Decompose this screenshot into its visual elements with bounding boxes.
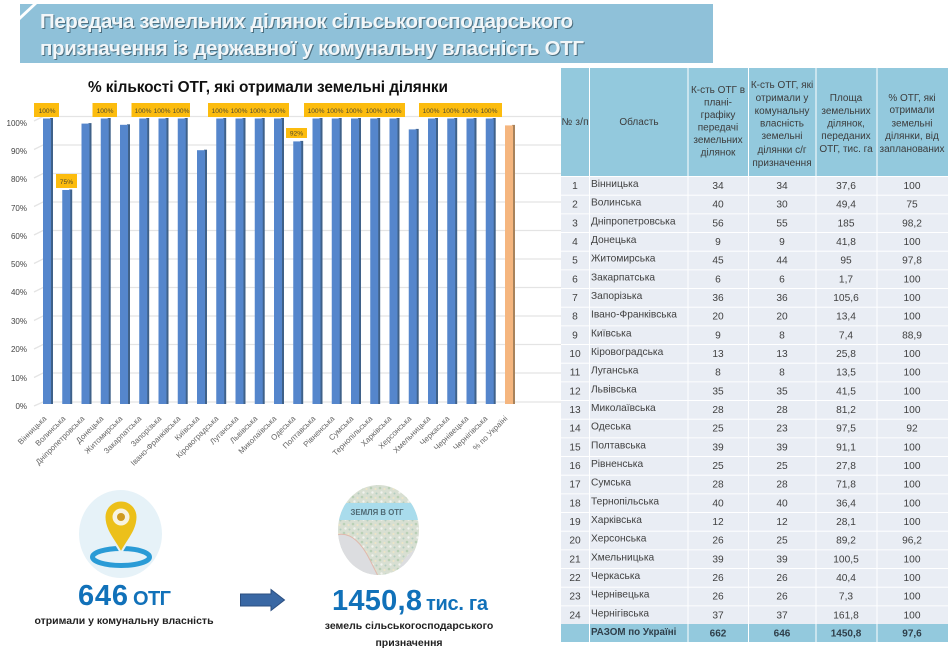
table header: графіку xyxy=(701,109,735,121)
category labels: Чернівецька xyxy=(432,414,471,452)
table rows: 27,8 xyxy=(836,461,856,472)
category labels: % по Україні xyxy=(471,414,510,452)
table header: ділянки с/г xyxy=(758,145,807,156)
title banner xyxy=(20,4,713,63)
icon: land map circle: ЗЕМЛЯ В ОТГ xyxy=(350,508,404,517)
table header: К-сть ОТГ, які xyxy=(751,80,813,91)
table rows: 36 xyxy=(776,293,788,304)
title banner: Передача земельних ділянок сільськогосподарського xyxy=(40,10,573,33)
table rows: 100 xyxy=(904,610,921,621)
chart title: % кількості ОТГ, які отримали земельні ділянки xyxy=(88,79,448,96)
table header: призначення xyxy=(752,158,812,169)
table rows: 25 xyxy=(776,536,788,547)
table rows: 5 xyxy=(572,256,578,267)
data labels: 100% xyxy=(154,108,171,115)
table rows: 37,6 xyxy=(836,181,856,192)
table rows: 44 xyxy=(776,256,788,267)
table rows: 26 xyxy=(776,592,788,603)
y axis labels: 90% xyxy=(11,147,27,156)
table rows: 96,2 xyxy=(902,536,922,547)
data labels: 100% xyxy=(327,108,344,115)
table rows: Дніпропетровська xyxy=(591,216,676,227)
table rows: 39 xyxy=(776,442,788,453)
table rows: 100 xyxy=(904,312,921,323)
table rows: 91,1 xyxy=(836,442,856,453)
y axis labels: 50% xyxy=(11,260,27,269)
stat: 1450,8 тис. га: тис. га xyxy=(426,593,489,615)
table rows: 12 xyxy=(776,517,788,528)
data labels: 100% xyxy=(366,108,383,115)
table rows: Рівненська xyxy=(591,459,643,470)
table rows: 11 xyxy=(570,368,581,379)
data labels: 100% xyxy=(346,108,363,115)
table rows: Івано-Франківська xyxy=(591,310,677,321)
y axis labels: 30% xyxy=(11,317,27,326)
category labels: Миколаївська xyxy=(237,414,279,456)
data labels: 100% xyxy=(97,108,114,115)
table rows: 21 xyxy=(569,554,581,565)
table rows: 100 xyxy=(904,442,921,453)
table rows: 28 xyxy=(776,480,788,491)
table rows: 6 xyxy=(572,274,578,285)
table rows: 25 xyxy=(712,424,724,435)
table total row: 646 xyxy=(774,628,791,640)
table rows: 41,5 xyxy=(836,386,856,397)
table total row: 1450,8 xyxy=(831,628,862,640)
bars xyxy=(43,118,515,404)
table rows: 37 xyxy=(712,610,724,621)
table rows: 100 xyxy=(904,554,921,565)
table rows: 24 xyxy=(569,610,581,621)
data labels: 100% xyxy=(385,108,402,115)
table rows: 100 xyxy=(904,480,921,491)
category labels: Івано-Франківська xyxy=(129,414,183,467)
table header: земельних xyxy=(693,135,743,146)
table rows: 95 xyxy=(840,256,852,267)
data labels: 100% xyxy=(481,108,498,115)
table rows: 23 xyxy=(776,424,788,435)
table rows: 2 xyxy=(572,200,578,211)
table rows: 36,4 xyxy=(836,498,856,509)
y axis labels: 80% xyxy=(11,175,27,184)
stat: 646 ОТГ: ОТГ xyxy=(133,588,171,610)
table rows: Київська xyxy=(591,328,632,339)
table rows: 39 xyxy=(712,554,724,565)
table header: % ОТГ, які xyxy=(888,93,936,104)
table rows: 100 xyxy=(904,573,921,584)
table rows: 1 xyxy=(572,181,578,192)
stat: 1450,8 тис. га xyxy=(332,585,489,617)
table rows: 25 xyxy=(712,461,724,472)
category labels: Полтавська xyxy=(281,414,318,451)
y axis labels: 10% xyxy=(11,374,27,383)
category labels: Луганська xyxy=(208,414,241,446)
category labels: Рівненська xyxy=(301,414,337,449)
data labels: 100% xyxy=(135,108,152,115)
table header: переданих xyxy=(821,131,871,142)
table rows: Донецька xyxy=(591,235,637,246)
table rows: 13,4 xyxy=(836,312,856,323)
table rows: 13 xyxy=(776,349,788,360)
data labels: 92% xyxy=(290,130,303,138)
table header: отримали xyxy=(890,105,934,116)
table rows: 88,9 xyxy=(902,330,922,341)
table rows: 100 xyxy=(904,293,921,304)
table rows: 41,8 xyxy=(836,237,856,248)
table header: № з/п xyxy=(562,117,588,128)
table rows: 15 xyxy=(569,442,581,453)
caption: 646: отримали у комунальну власність xyxy=(34,615,214,627)
y axis labels: 60% xyxy=(11,232,27,241)
table header: запланованих xyxy=(880,144,944,155)
table rows: 35 xyxy=(776,386,788,397)
table rows: 97,5 xyxy=(836,424,856,435)
table rows: 7,3 xyxy=(839,592,853,603)
table rows: 45 xyxy=(712,256,724,267)
y axis labels: 100% xyxy=(7,119,27,128)
table header: земельні xyxy=(892,118,932,130)
table rows: Хмельницька xyxy=(591,552,655,563)
data labels: 100% xyxy=(39,108,56,115)
table rows: Закарпатська xyxy=(591,272,655,283)
stat: 646 ОТГ: 646 xyxy=(78,580,128,612)
table rows: 100 xyxy=(904,517,921,528)
table rows: 89,2 xyxy=(836,536,856,547)
table rows: 30 xyxy=(776,200,788,211)
table rows: 26 xyxy=(712,573,724,584)
table rows: 105,6 xyxy=(833,293,859,304)
table rows: 7 xyxy=(572,293,578,304)
data labels: 100% xyxy=(462,108,479,115)
category labels: Сумська xyxy=(327,414,356,442)
table rows: 100 xyxy=(904,181,921,192)
table rows: 8 xyxy=(779,330,785,341)
category labels: Хмельницька xyxy=(391,414,433,455)
table rows: 100 xyxy=(904,349,921,360)
table header: плані- xyxy=(704,98,732,108)
table rows: 28 xyxy=(712,480,724,491)
table header: ділянок xyxy=(701,148,736,158)
category labels: Закарпатська xyxy=(102,414,144,456)
stat: 646 ОТГ xyxy=(78,580,171,612)
table rows: 40 xyxy=(776,498,788,509)
data labels: 100% xyxy=(212,108,229,115)
table rows: 100,5 xyxy=(833,554,859,565)
table header: передачі xyxy=(698,122,738,134)
table rows: Сумська xyxy=(591,478,631,489)
table rows: 55 xyxy=(776,218,788,229)
category labels: Одеська xyxy=(269,414,298,442)
data labels: 100% xyxy=(443,108,460,115)
table rows: 6 xyxy=(779,274,785,285)
table rows: 100 xyxy=(904,237,921,248)
table rows: 100 xyxy=(904,498,921,509)
title banner: призначення із державної у комунальну власність ОТГ xyxy=(41,38,585,61)
table rows: Кіровоградська xyxy=(591,347,664,358)
caption: 1450,8 xyxy=(325,620,493,649)
table rows: 9 xyxy=(572,330,578,341)
data table xyxy=(561,68,948,642)
table header: земельних xyxy=(821,106,871,117)
table rows: 25 xyxy=(776,461,788,472)
table rows: 9 xyxy=(779,237,785,248)
table header: Площа xyxy=(830,93,863,104)
table rows: Чернігівська xyxy=(591,608,649,619)
icon: land map circle xyxy=(338,485,419,575)
bar chart xyxy=(7,103,561,467)
y axis labels: 40% xyxy=(11,288,27,297)
table header: Область xyxy=(619,116,659,128)
caption: 1450,8: призначення xyxy=(375,637,443,649)
data labels: 100% xyxy=(231,108,248,115)
table rows: 71,8 xyxy=(836,480,856,491)
table rows: 40,4 xyxy=(836,573,856,584)
title banner: Передача земельних ділянок сільськогосподарського xyxy=(41,11,574,34)
table rows: 13 xyxy=(712,349,724,360)
table rows: 14 xyxy=(569,424,581,435)
table rows: 100 xyxy=(904,405,921,416)
category labels: Вінницька xyxy=(16,414,49,446)
table rows: 19 xyxy=(569,517,581,528)
table rows: 20 xyxy=(776,312,788,323)
table rows: 28 xyxy=(712,405,724,416)
table rows: Херсонська xyxy=(591,534,647,545)
category labels: Запорізька xyxy=(129,414,164,448)
data labels: 100% xyxy=(250,108,267,115)
table rows: 56 xyxy=(712,218,724,229)
table header: власність xyxy=(760,118,804,130)
table header: комунальну xyxy=(755,106,809,117)
table rows: 75 xyxy=(906,200,918,211)
caption: 1450,8: земель сільськогосподарського xyxy=(325,620,493,632)
table rows: Черкаська xyxy=(591,571,641,582)
table rows: Львівська xyxy=(591,384,637,395)
table header: отримали у xyxy=(756,93,808,104)
table rows: Луганська xyxy=(591,366,639,377)
table total row: 97,6 xyxy=(902,628,922,640)
table rows: 12 xyxy=(712,517,724,528)
table header: ОТГ, тис. га xyxy=(819,144,873,155)
table rows: Вінницька xyxy=(591,179,639,190)
table rows: 23 xyxy=(569,592,581,603)
table rows: Волинська xyxy=(591,198,642,209)
table rows: 4 xyxy=(572,237,578,248)
table rows: 49,4 xyxy=(836,200,856,211)
table rows: 40 xyxy=(712,498,724,509)
table rows: 100 xyxy=(904,274,921,285)
table rows: 26 xyxy=(712,536,724,547)
arrow xyxy=(240,590,284,610)
table rows: 28 xyxy=(776,405,788,416)
table rows: 161,8 xyxy=(833,610,859,621)
category labels: Чернігівська xyxy=(451,414,490,452)
table rows: 40 xyxy=(712,200,724,211)
table rows: 20 xyxy=(712,312,724,323)
table rows: 6 xyxy=(715,274,721,285)
table rows: 81,2 xyxy=(836,405,856,416)
table rows: 185 xyxy=(838,218,855,229)
table total row: 662 xyxy=(710,628,727,640)
category labels: Київська xyxy=(173,414,202,443)
table rows: 100 xyxy=(904,368,921,379)
table total row xyxy=(561,624,948,642)
data labels: 100% xyxy=(423,108,440,115)
table rows: Тернопільська xyxy=(591,496,659,507)
table rows: 39 xyxy=(776,554,788,565)
table rows: 26 xyxy=(776,573,788,584)
table rows: Чернівецька xyxy=(591,590,650,601)
table rows: Житомирська xyxy=(591,254,656,265)
table rows: 92 xyxy=(906,424,918,435)
table rows: 18 xyxy=(569,498,581,509)
table rows: Полтавська xyxy=(591,440,646,451)
table rows: 12 xyxy=(569,386,581,397)
table header: земельні xyxy=(762,131,802,142)
table rows: 8 xyxy=(572,312,578,323)
stat: 1450,8 тис. га: 1450,8 xyxy=(332,585,422,617)
table rows: 97,8 xyxy=(902,256,922,267)
category labels: Донецька xyxy=(74,414,106,445)
category labels: Кіровоградська xyxy=(174,414,221,460)
table rows: 1,7 xyxy=(839,274,853,285)
table rows: 39 xyxy=(712,442,724,453)
table rows: 100 xyxy=(904,592,921,603)
title banner: призначення із державної у комунальну власність ОТГ xyxy=(40,37,584,60)
table rows: 26 xyxy=(712,592,724,603)
table rows: 22 xyxy=(569,573,581,584)
table rows: Миколаївська xyxy=(591,403,656,414)
table header xyxy=(561,68,948,176)
table rows: Запорізька xyxy=(591,291,643,302)
category labels: Тернопільська xyxy=(331,414,375,458)
table header: К-сть ОТГ в xyxy=(691,85,745,96)
table rows: 10 xyxy=(569,349,581,360)
table rows: 100 xyxy=(904,461,921,472)
category labels xyxy=(16,414,510,467)
table rows: Одеська xyxy=(591,422,631,433)
table total row: РАЗОМ по Україні xyxy=(591,627,677,638)
table rows: 3 xyxy=(572,218,578,229)
y axis labels: 0% xyxy=(15,402,27,411)
table rows: 13 xyxy=(569,405,581,416)
table rows: 8 xyxy=(779,368,785,379)
table rows: 13,5 xyxy=(836,368,856,379)
icon: location pin xyxy=(79,490,162,578)
data labels: 100% xyxy=(173,108,190,115)
category labels: Дніпропетровська xyxy=(34,414,87,467)
category labels: Харківська xyxy=(359,414,394,448)
table rows: 100 xyxy=(904,386,921,397)
table rows: 36 xyxy=(712,293,724,304)
data labels xyxy=(34,103,502,188)
table rows: 20 xyxy=(569,536,581,547)
table rows: 9 xyxy=(715,237,721,248)
category labels: Херсонська xyxy=(377,414,414,451)
table rows: 9 xyxy=(715,330,721,341)
table rows: 17 xyxy=(569,480,581,491)
data labels: 100% xyxy=(308,108,325,115)
table rows xyxy=(561,176,948,624)
category labels: Житомирська xyxy=(83,414,125,456)
category labels: Черкаська xyxy=(418,414,452,447)
table rows: 16 xyxy=(569,461,581,472)
table rows: 7,4 xyxy=(839,330,853,341)
table rows: 8 xyxy=(715,368,721,379)
data labels: 75% xyxy=(60,179,73,186)
table rows: 25,8 xyxy=(836,349,856,360)
table rows: Харківська xyxy=(591,515,642,526)
table rows: 37 xyxy=(776,610,788,621)
y axis labels: 70% xyxy=(11,204,27,213)
data labels: 100% xyxy=(269,108,286,115)
table header: ділянок, xyxy=(827,118,865,130)
y axis labels xyxy=(7,119,27,411)
table rows: 28,1 xyxy=(836,517,856,528)
category labels: Волинська xyxy=(34,414,68,448)
table rows: 35 xyxy=(712,386,724,397)
y axis labels: 20% xyxy=(11,345,27,354)
table rows: 34 xyxy=(776,181,788,192)
category labels: Львівська xyxy=(228,414,260,445)
table rows: 34 xyxy=(712,181,724,192)
table header: ділянки, від xyxy=(885,131,939,142)
table rows: 98,2 xyxy=(902,218,922,229)
